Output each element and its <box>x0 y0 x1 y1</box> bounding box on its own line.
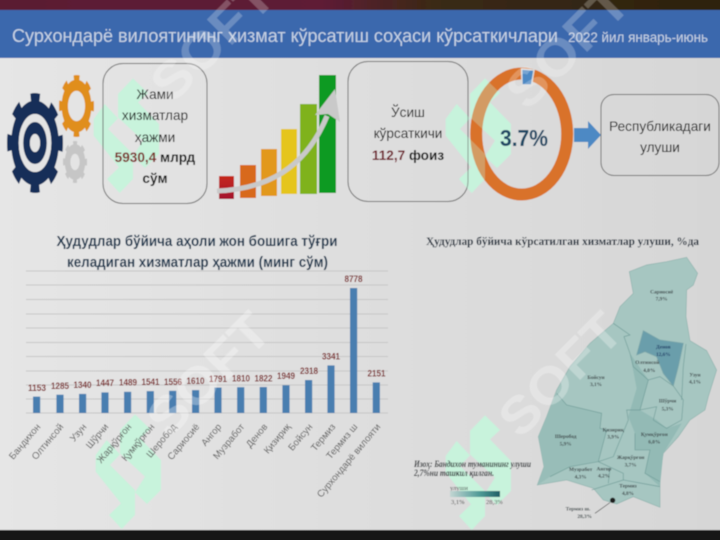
panel: growth indicator: Ўсиш <box>391 105 425 120</box>
Termez city marker <box>610 498 615 503</box>
bottom dark strip <box>0 530 720 540</box>
category labels: Узун <box>68 422 89 444</box>
category labels: Ангор <box>199 422 224 449</box>
map legend: 3,1% <box>451 499 465 506</box>
chart heading: келадиган хизматлар ҳажми (минг сўм) <box>67 255 328 271</box>
mint tint over ring <box>446 78 511 193</box>
map labels: 7,9% <box>656 297 668 303</box>
map labels: 4,8% <box>622 491 634 497</box>
value labels: 1791 <box>209 374 228 385</box>
panel: total services: Жами <box>136 87 174 102</box>
map legend <box>450 485 503 506</box>
donut chart: ring <box>476 69 567 194</box>
value labels: 1822 <box>254 374 272 384</box>
category labels: Музработ <box>211 421 248 462</box>
watermark: mint logo bottom right <box>446 415 511 530</box>
category labels <box>7 421 383 500</box>
chart heading: Ҳудудлар бўйича аҳоли жон бошига тўғри <box>56 234 338 250</box>
value labels: 1949 <box>277 371 295 382</box>
panel: growth indicator <box>348 62 468 202</box>
map note <box>413 459 532 479</box>
map labels: 12,6% <box>656 352 671 358</box>
category labels: Термиз ш <box>324 422 360 462</box>
value labels: 1489 <box>119 378 137 388</box>
icon: growth bars with arrow <box>217 75 340 199</box>
map labels: 28,3% <box>577 514 592 520</box>
map labels: Сариосиё <box>650 289 674 295</box>
map labels: Ангор <box>597 467 611 473</box>
category labels: Денов <box>244 422 270 450</box>
map labels: Қизириқ <box>603 428 625 434</box>
panel: republic share: Республикадаги <box>609 119 711 134</box>
map heading: Ҳудудлар бўйича кўрсатилган хизматлар улуши, %да <box>426 235 699 248</box>
map legend: улуши <box>450 485 468 492</box>
map labels: Узун <box>689 373 701 379</box>
category labels: Шўрчи <box>84 422 111 451</box>
map labels: 5,9% <box>560 441 572 447</box>
title: Сурхондарё вилоятининг хизмат кўрсатиш соҳаси кўрсаткичлари <box>12 25 558 46</box>
panel: total services: 5930,4 млрд <box>115 150 196 165</box>
value labels: 1447 <box>96 378 114 389</box>
category labels: Термиз <box>309 421 339 454</box>
donut value: 3.7% <box>500 125 548 151</box>
map note: Изоҳ: Бандихон туманининг улуши <box>413 459 532 470</box>
header banner <box>0 10 720 58</box>
gear: grey <box>64 143 86 181</box>
gear: orange <box>61 78 92 134</box>
panel: republic share: улуши <box>640 140 680 155</box>
map labels <box>555 289 701 520</box>
value labels: 1340 <box>74 380 92 391</box>
map labels: Жарқўрғон <box>617 454 644 461</box>
district: Sherobod <box>537 393 607 485</box>
value labels: 1541 <box>142 377 160 388</box>
category labels: Қумқўрғон <box>120 422 157 464</box>
map note: 2,7%ни ташкил қилган. <box>413 468 494 479</box>
map labels: 3,7% <box>625 462 637 468</box>
panel: total services: сўм <box>142 171 168 186</box>
period subtitle: 2022 йил январь-июнь <box>568 30 708 45</box>
category labels: Қизириқ <box>262 421 294 456</box>
value labels: 2318 <box>300 366 319 377</box>
bars <box>33 288 380 413</box>
value labels <box>28 274 386 394</box>
panel: total services: ҳажми <box>135 130 175 145</box>
map: Surkhandarya districts <box>537 257 717 520</box>
map legend: 28,3% <box>486 499 503 506</box>
map labels: Қумқўрғон <box>641 431 668 438</box>
map labels: Термиз <box>619 484 638 490</box>
value labels: 2151 <box>368 368 386 380</box>
map labels: Музработ <box>569 466 593 473</box>
district borders <box>550 323 686 490</box>
map labels: 3,1% <box>590 382 602 388</box>
arrow to share box <box>574 121 601 149</box>
category labels: Жарқўрғон <box>95 422 134 466</box>
panel: total services <box>103 64 207 204</box>
map labels: Олтинсой <box>635 359 659 366</box>
map labels: Шеробод <box>555 433 577 440</box>
map labels: Денов <box>656 345 671 351</box>
watermark: mint logo top left <box>94 78 159 193</box>
map labels: Бойсун <box>587 374 605 381</box>
map labels: 4,3% <box>575 474 587 480</box>
chart heading <box>56 234 338 271</box>
district: Denov <box>637 331 683 386</box>
icon: gears <box>10 78 92 188</box>
panel: total services: хизматлар <box>122 108 188 123</box>
category labels: Бойсун <box>286 422 315 453</box>
value labels: 1285 <box>51 381 70 392</box>
value labels: 3341 <box>322 352 341 362</box>
value labels: 1810 <box>232 374 250 384</box>
district: central band <box>628 353 682 487</box>
watermark: SOFT map: SOFT <box>487 301 635 448</box>
category labels: Бандихон <box>7 422 43 462</box>
map labels: Термиз ш. <box>566 507 591 513</box>
map labels: 6,0% <box>648 439 660 445</box>
category labels: Олтинсой <box>30 422 66 462</box>
value labels: 1153 <box>28 383 46 394</box>
value labels: 8778 <box>344 274 363 285</box>
category labels: Сариосиё <box>166 422 202 463</box>
map labels: 4,0% <box>643 368 655 374</box>
map labels: 3,9% <box>607 435 619 441</box>
watermark: mint logo top right <box>446 78 511 193</box>
category labels: Шеробод <box>144 422 180 460</box>
bar chart: services per capita <box>7 271 388 500</box>
map labels: Шўрчи <box>659 398 676 405</box>
map labels: 4,2% <box>598 474 610 480</box>
map outline <box>537 257 717 507</box>
map labels: 4,1% <box>689 380 701 386</box>
panel: republic share <box>601 94 719 176</box>
value labels: 1610 <box>186 376 204 387</box>
gear: navy <box>10 98 60 188</box>
panel: growth indicator: 112,7 фоиз <box>372 148 444 163</box>
watermark: mint logo bottom left <box>96 414 161 529</box>
map labels: 5,3% <box>662 406 674 412</box>
watermark: SOFT chart: SOFT <box>135 301 283 448</box>
top decorative strip <box>0 0 720 10</box>
value labels: 1556 <box>164 377 182 388</box>
panel: growth indicator: кўрсаткичи <box>374 126 442 141</box>
category labels: Сурхондарё вилояти <box>315 422 383 500</box>
